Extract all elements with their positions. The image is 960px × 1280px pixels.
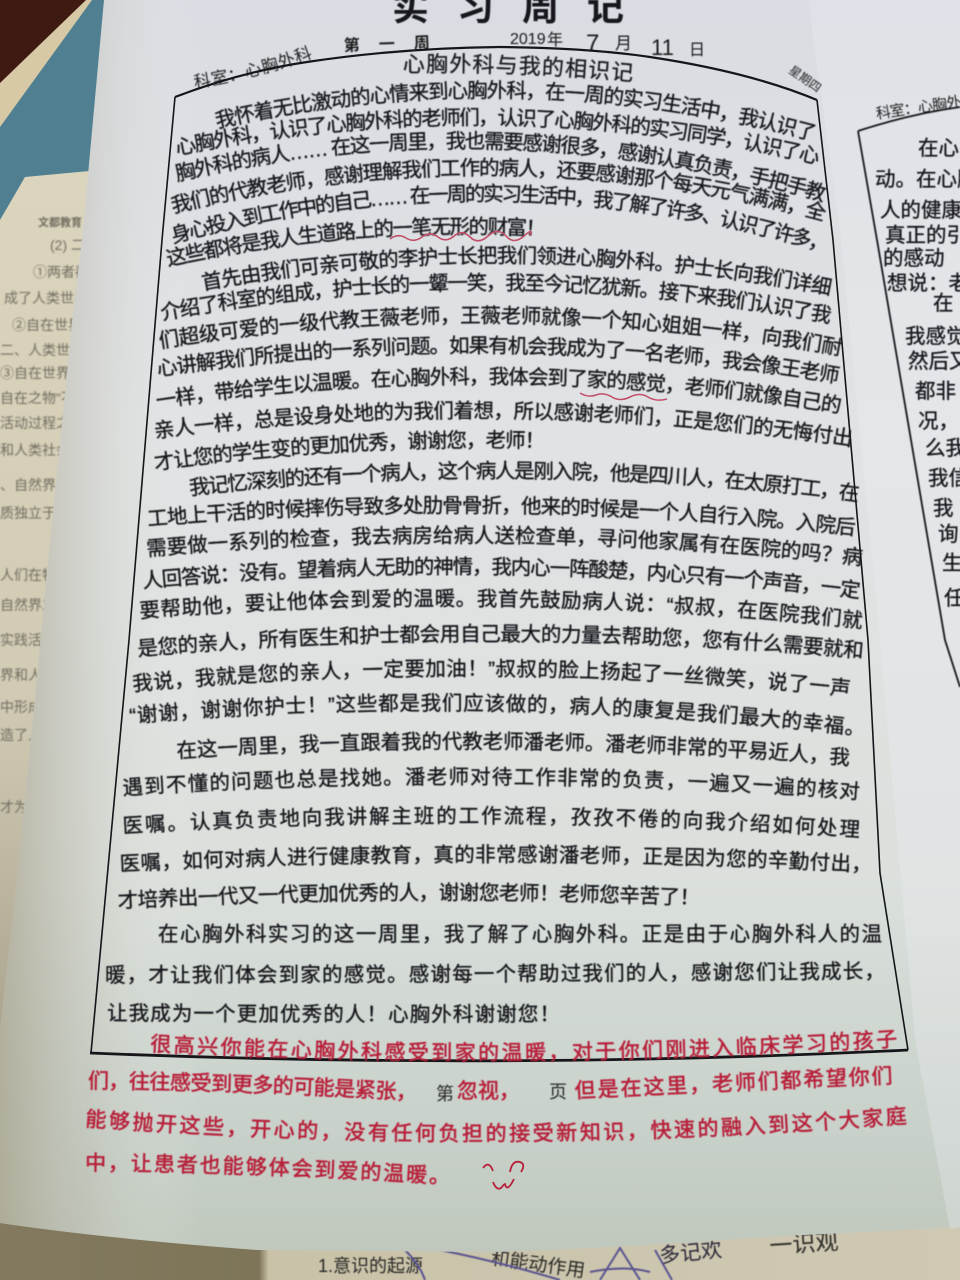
background document on the left	[0, 170, 112, 1040]
background document on the left: (2) 二	[50, 237, 85, 253]
text block: paragraph 5: 在心胸外科实习的这一周里，我了解了心胸外科。正是由于心胸外科人的温	[158, 922, 882, 944]
text block: paragraph 3: 是您的亲人，所有医生和护士都会用自己最大的力量去帮助您，您有什么需要就和	[138, 622, 864, 660]
icon: hand-drawn smiley	[483, 1162, 523, 1189]
background document on the left: 界和人类	[0, 667, 56, 683]
text block: paragraph 4	[118, 730, 860, 910]
text block: paragraph 1: 心胸外科，认识了心胸外科的老师们，认识了心胸外科的实习同学，认识了心	[176, 106, 819, 165]
text block: paragraph 3: 需要做一系列的检查，我去病房给病人送检查单，寻问他家属有在医院的吗？病	[146, 524, 864, 568]
panel: next page entry: 询	[938, 523, 958, 546]
panel: writing box frame	[90, 47, 908, 1061]
text block: paragraph 1: 身心投入到工作中的自己…… 在一周的实习生活中，我了解了许多、认识了许多，	[172, 182, 816, 251]
background document on the left: 二、人类世界实	[0, 342, 98, 358]
text block: paragraph 2: 才让您的学生变的更加优秀，谢谢您，老师！	[154, 429, 532, 472]
callout: teacher's red comment: 们，往往感受到更多的可能是紧张，	[88, 1070, 404, 1102]
background document on the left: 活动过程之中。	[0, 415, 98, 431]
text block: paragraph 1: 胸外科的病人…… 在这一周里，我也需要感谢很多，感谢认真负责，手把手教	[174, 130, 826, 204]
panel: next page entry: 人的健康	[880, 199, 960, 222]
panel: next page entry: 的感动	[883, 247, 944, 270]
panel: next page entry: 都非	[915, 380, 956, 403]
lower notebook under the page	[0, 1200, 960, 1280]
panel: next page entry: 在心	[918, 137, 959, 160]
background document on the left: 和人类社会的	[0, 442, 84, 458]
text block: paragraph 5: 暖，才让我们体会到家的感觉。感谢每一个帮助过我们的人，感谢您们让我成长，	[106, 960, 872, 985]
background document on the left: 成了人类世界求	[4, 290, 102, 306]
header row: department, week and date: 7	[586, 30, 599, 57]
text block: paragraph 1: 我怀着无比激动的心情来到心胸外科，在一周的实习生活中，我认识了	[214, 79, 816, 140]
text block: paragraph 3: 要帮助他，要让他体会到爱的温暖。我首先鼓励病人说：“叔叔，在医院我们就	[139, 588, 864, 630]
background document on the left: 造了人	[0, 727, 42, 743]
header row: department, week and date: 月	[615, 34, 632, 53]
text block: paragraph 4: 才培养出一代又一代更加优秀的人，谢谢您老师！老师您辛苦了！	[118, 882, 688, 910]
text block: paragraph 3: 人回答说：没有。望着病人无助的神情，我内心一阵酸楚，内心只有一个声音，一定	[143, 555, 861, 600]
text block: paragraph 2: 首先由我们可亲可敬的李护士长把我们领进心胸外科。护士长向我们详细	[200, 244, 833, 297]
text block: paragraph 2: 们超级可爱的一级代教王薇老师，王薇老师就像一个知心姐姐一样，向我们耐	[158, 304, 843, 357]
handwritten title: 心胸外科与我的相识记	[403, 52, 633, 83]
text block: paragraph 5	[106, 922, 882, 1024]
background document on the left: 文都教育	[38, 215, 82, 229]
background document on the left: 才为自	[0, 799, 42, 815]
header row: department, week and date: 科室：心胸外科	[193, 44, 312, 90]
background document on the left: 、自然界和	[0, 477, 70, 493]
red wavy underline: 一笔无形的财富	[390, 232, 531, 241]
panel: next page entry	[856, 94, 960, 688]
text block: paragraph 2: 介绍了科室的组成，护士长的一颦一笑，我至今记忆犹新。接下来我们认识了我	[160, 272, 832, 325]
panel: next page entry: 在	[933, 292, 954, 315]
header row: department, week and date: 星期四	[786, 63, 824, 95]
header row: department, week and date: 11	[651, 35, 674, 60]
panel: next page entry: 况，	[918, 410, 959, 433]
background document on the left: 中形成既	[0, 699, 56, 715]
text block: paragraph 2: 心讲解我们所提出的一系列问题。如果有机会我成为了一名老师，我会像王老师	[158, 334, 841, 384]
callout: teacher's red comment: 能够抛开这些，开心的，没有任何负担的接受新知识，快速的融入到这个大家庭	[86, 1105, 908, 1144]
callout: teacher's red comment: 页	[549, 1082, 567, 1102]
header row: department, week and date: 日	[689, 42, 705, 59]
text block: paragraph 4: 医嘱，如何对病人进行健康教育，真的非常感谢潘老师，正是因为您的辛勤付出，	[120, 843, 859, 874]
text block: paragraph 2: 一样，带给学生以温暖。在心胸外科，我体会到了家的感觉，老师们就像自己的	[156, 366, 842, 414]
background document on the left: 人们在特	[0, 567, 56, 583]
background document on the left: ③自在世界和人类	[0, 365, 112, 381]
background document on the left: ②自在世界和	[12, 317, 96, 333]
text block: paragraph 2: 亲人一样，总是设身处地的为我们着想，所以感谢老师们，正是您们的无悔付出	[154, 400, 852, 448]
text block: paragraph 2	[154, 244, 852, 472]
text block: paragraph 3	[128, 460, 864, 736]
callout: teacher's red comment: 但是在这里，老师们都希望你们	[574, 1065, 892, 1100]
background document on the left: 自然界发	[0, 597, 56, 613]
text block: paragraph 3: 我记忆深刻的还有一个病人，这个病人是刚入院，他是四川人，在太原打工，在	[188, 460, 860, 503]
panel: next page entry: 科室：心胸外	[876, 94, 960, 120]
background document on the left: 自在之物"不断	[0, 390, 89, 406]
header row: department, week and date: 年	[547, 31, 563, 49]
text block: paragraph 4: 遇到不懂的问题也总是找她。潘老师对待工作非常的负责，一遍又一遍的核对	[122, 766, 860, 802]
callout: teacher's red comment: 第	[436, 1084, 454, 1104]
text block: paragraph 3: “谢谢，谢谢你护士！”这些都是我们应该做的，病人的康复是我们最大的幸福。	[128, 692, 852, 736]
header row: department, week and date	[193, 30, 824, 95]
lower notebook under the page: 一识观	[769, 1228, 839, 1259]
red wavy underline: 家的感觉	[580, 393, 667, 400]
text block: paragraph 1: 这些都将是我人生道路上的一笔无形的财富！	[165, 216, 534, 268]
text block: paragraph 4: 在这一周里，我一直跟着我的代教老师潘老师。潘老师非常的平易近人，我	[176, 730, 850, 768]
header row: department, week and date: 第一周	[343, 32, 449, 55]
callout: teacher's red comment: 中，让患者也能够体会到爱的温暖。	[86, 1152, 438, 1186]
lower notebook under the page: 1.意识的起源	[318, 1256, 423, 1276]
text block: paragraph 3: 工地上干活的时候摔伤导致多处肋骨骨折，他来的时候是一个人自行入院。入院后	[148, 494, 856, 538]
background document on the left: 质独立于人	[0, 505, 70, 521]
background document on the left: ①两者都	[33, 264, 89, 280]
text block: paragraph 1	[165, 79, 826, 268]
background document on the left: 实践活动	[0, 632, 56, 648]
callout: teacher's red comment: 很高兴你能在心胸外科感受到家的温暖，对于你们刚进入临床学习的孩子	[150, 1029, 898, 1063]
panel: next page entry: 我	[933, 497, 954, 520]
callout: teacher's red comment: 忽视，	[457, 1080, 520, 1103]
lower notebook under the page: 多记欢	[658, 1239, 723, 1268]
text block: paragraph 5: 让我成为一个更加优秀的人！心胸外科谢谢您！	[107, 1002, 547, 1024]
text block: paragraph 3: 我说，我就是您的亲人，一定要加油！”叔叔的脸上扬起了一丝微笑，说了一声	[132, 658, 851, 696]
header row: department, week and date: 2019	[510, 31, 546, 48]
text block: paragraph 4: 医嘱。认真负责地向我讲解主班的工作流程，孜孜不倦的向我介绍如何处理	[123, 804, 860, 839]
text block: paragraph 1: 我们的代教老师，感谢理解我们工作的病人，还要感谢那个每天元气满满，全	[170, 156, 826, 222]
callout: teacher's red comment	[86, 1029, 908, 1186]
